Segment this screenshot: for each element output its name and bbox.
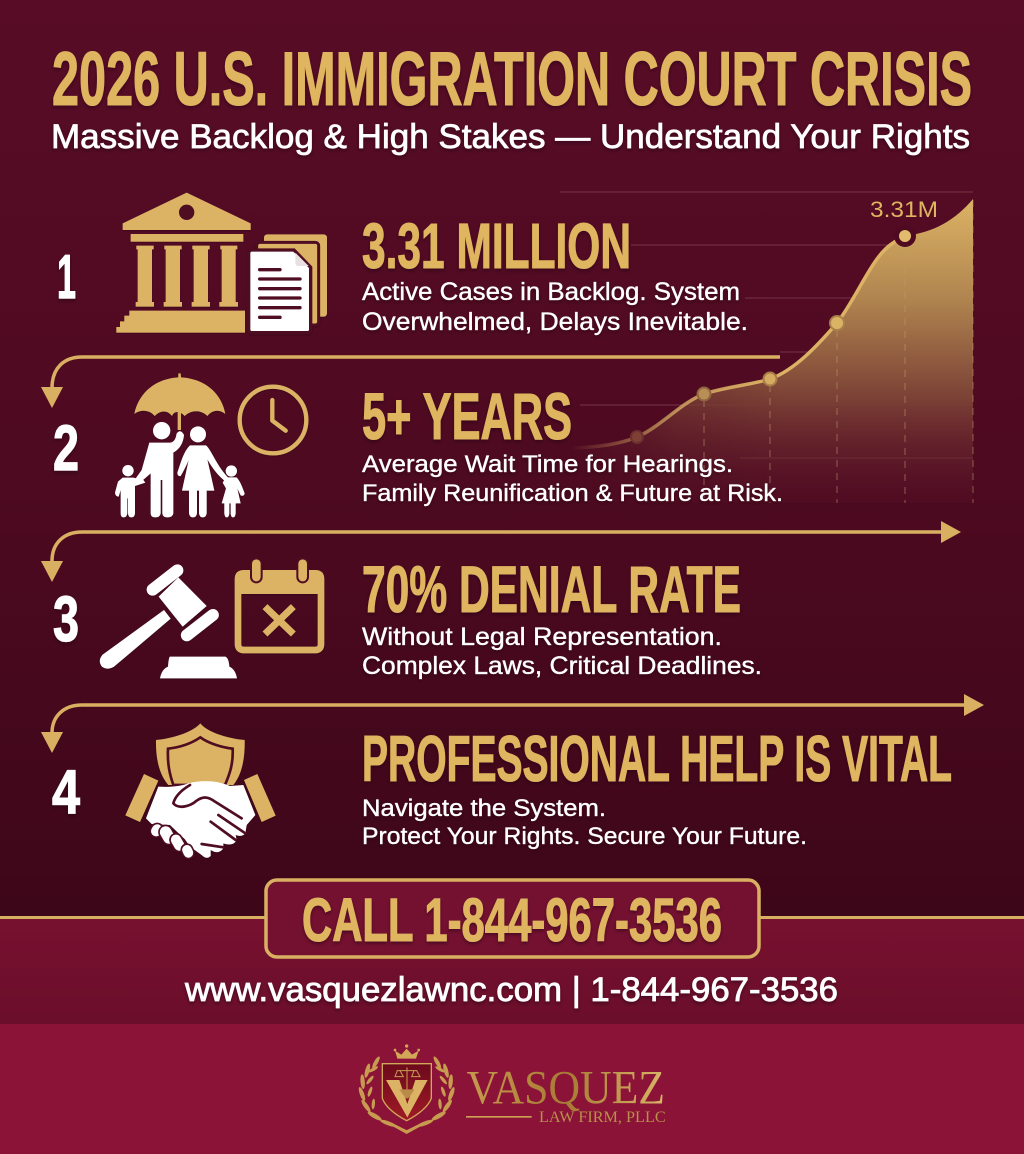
heading: 3.31 million: 3.31 MILLION: [362, 210, 631, 282]
icon: gavel with calendar: [100, 557, 324, 678]
line chart: backlog growth: [560, 192, 973, 503]
logo subtitle: LAW FIRM, PLLC: [539, 1109, 666, 1126]
logo V: [386, 1080, 428, 1117]
heading: denial rate: 70% DENIAL RATE: [362, 552, 741, 626]
logo shield: [382, 1064, 431, 1121]
text: wait line 1: Average Wait Time for Hearings.: [362, 451, 733, 478]
logo wordmark: VASQUEZ: [467, 1062, 665, 1114]
text: denial line 1: Without Legal Representation.: [362, 623, 722, 651]
chart area fill: [622, 199, 973, 484]
arrow: step 1 to 2: [41, 357, 780, 408]
logo: Vasquez Law Firm: [357, 1044, 666, 1134]
text: backlog line 1: Active Cases in Backlog. System: [362, 278, 740, 306]
arrow: step 2 to 3: [41, 521, 961, 582]
chart trend line: [573, 236, 905, 448]
icon: courthouse with documents: [116, 193, 327, 333]
text: denial line 2: Complex Laws, Critical Deadlines.: [362, 652, 762, 680]
logo laurel right: [405, 1056, 456, 1134]
step number 1: 1: [57, 243, 76, 312]
icon: handshake with shield: [125, 723, 276, 860]
divider line with call button: [0, 880, 1024, 957]
text: wait line 2: Family Reunification & Future at Risk.: [362, 480, 783, 507]
chart label: 3.31M: [870, 197, 938, 222]
contact line: www.vasquezlawnc.com | 1-844-967-3536: [184, 971, 838, 1009]
arrow: step 3 to 4: [41, 694, 984, 753]
logo rule: [466, 1116, 532, 1118]
logo laurel left: [357, 1056, 408, 1134]
call button text: CALL 1-844-967-3536: [302, 886, 722, 954]
step number 3: 3: [53, 583, 79, 655]
chart point 2022: [631, 431, 643, 443]
text: backlog line 2: Overwhelmed, Delays Inevitable.: [362, 308, 748, 336]
step number 2: 2: [53, 412, 79, 484]
chart peak point: [896, 228, 914, 244]
chart point 2025: [830, 316, 844, 330]
text: help line 1: Navigate the System.: [362, 795, 606, 822]
icon: family under umbrella with clock: [115, 373, 306, 517]
logo crown: [394, 1044, 420, 1059]
subtitle: Massive Backlog & High Stakes — Understand Your Rights: [51, 118, 970, 156]
chart point 2023: [698, 388, 710, 400]
call button: [266, 880, 759, 957]
logo scales: [395, 1067, 420, 1098]
text: help line 2: Protect Your Rights. Secure Your Future.: [362, 823, 807, 850]
heading: 5+ years: 5+ YEARS: [362, 379, 572, 453]
step number 4: 4: [52, 758, 80, 827]
chart point 2024: [764, 372, 776, 386]
